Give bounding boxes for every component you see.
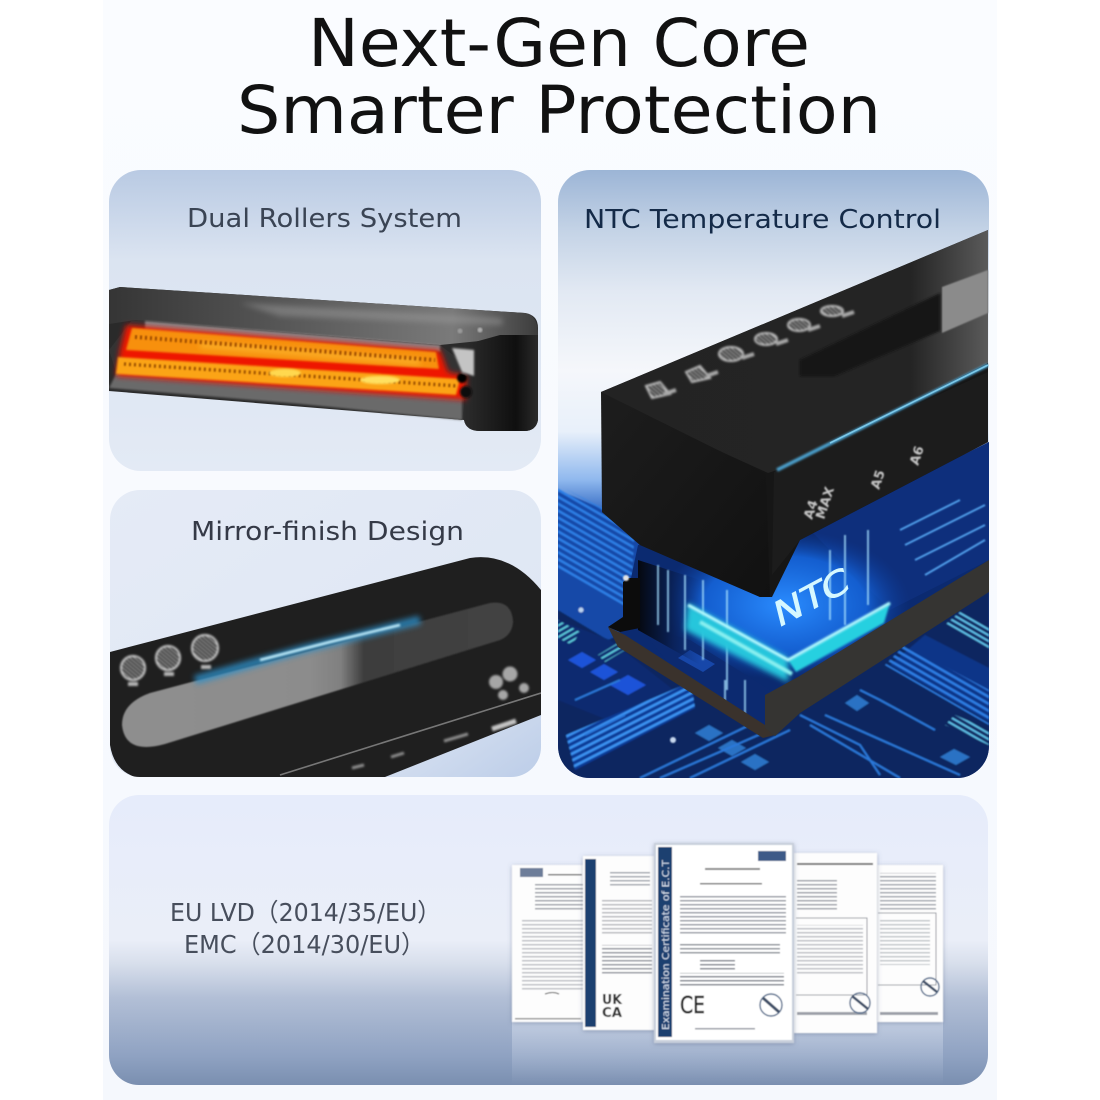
standards text [172,900,424,956]
size labels: MAX [814,485,838,521]
certificate 5 [877,865,943,1022]
certificate 1 [512,865,584,1022]
control buttons [489,666,529,700]
stamp [760,994,782,1016]
document reflections [512,1021,943,1072]
certificate 4 [793,853,877,1033]
circuit board [558,485,989,778]
panel: dual rollers system [109,170,541,471]
standards text: EMC（2014/30/EU） [184,930,425,959]
CE mark: CE [680,993,705,1019]
certificate 2: CA [602,1006,622,1021]
tray floor [688,640,735,668]
certificate 2 [583,856,655,1030]
panel: mirror-finish design [110,490,541,777]
size labels [802,444,928,521]
laminator cross-section [109,287,538,431]
certificate 3 main [654,843,794,1043]
circuit glow under device [618,442,989,737]
laminator body [601,230,988,597]
title: Next-Gen Core [308,5,810,82]
light streak [195,620,420,680]
logo badge [758,851,786,861]
laminator top view [110,557,541,777]
vertical certificate title: Examination Certificate of E.C.T [661,859,672,1030]
title [237,5,881,149]
cyan L band [685,603,788,682]
heading: mirror finish: Mirror-finish Design [191,517,464,547]
panel: NTC temperature control [558,170,989,778]
top mode icons [646,306,854,398]
front edge and size labels [280,693,541,775]
standards text: EU LVD（2014/35/EU） [170,898,441,927]
panel: certifications [109,795,988,1085]
front glowing edge [800,442,988,540]
roller glow [116,325,466,400]
laminator tray [608,560,989,743]
mode icons [121,635,218,684]
size labels: A5 [869,468,889,491]
size labels: A4 [802,498,822,521]
size labels: A6 [908,444,928,467]
roller gear end [452,348,474,398]
heading: NTC: NTC Temperature Control [584,205,941,235]
display window [942,270,988,333]
NTC chip label: NTC [770,559,852,636]
heading: dual rollers: Dual Rollers System [187,204,462,234]
mirror window [122,603,513,747]
title: Smarter Protection [237,72,881,149]
UKCA mark: UK [602,993,623,1008]
